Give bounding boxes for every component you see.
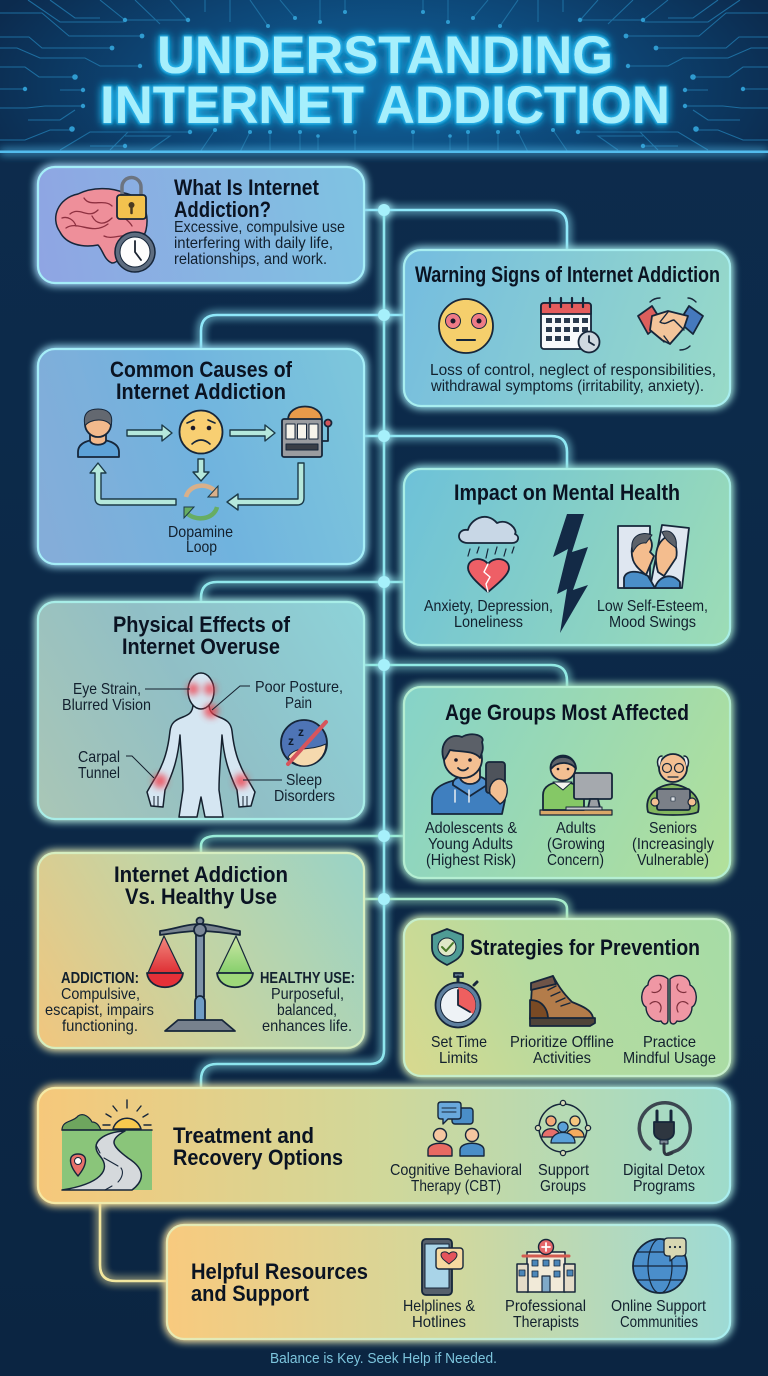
description: interfering with daily life, [174, 235, 333, 252]
text: healthy use: enhances life. [262, 1018, 352, 1035]
heading [191, 1259, 368, 1306]
labels: Seniors [649, 820, 697, 837]
icon: support groups [535, 1100, 591, 1156]
panel: helpful resources [167, 1225, 730, 1339]
callouts and labels: Pain [285, 695, 312, 712]
icon: calendar with clock [541, 298, 600, 352]
labels: (Growing [547, 836, 605, 853]
icon: cognitive behavioral therapy [428, 1102, 484, 1156]
text: addiction: Compulsive, [61, 986, 140, 1003]
labels: Limits [439, 1050, 478, 1067]
header banner [0, 0, 768, 153]
callouts and labels: Tunnel [78, 765, 120, 782]
labels: Activities [533, 1050, 591, 1067]
labels: Digital Detox [623, 1162, 705, 1179]
arrows: dopamine loop flow [90, 425, 304, 510]
heading [113, 612, 290, 659]
labels: Therapists [513, 1314, 579, 1331]
icon: road to recovery [62, 1100, 152, 1190]
panel: what is internet addiction [38, 167, 364, 283]
labels: Hotlines [412, 1314, 466, 1331]
labels: Cognitive Behavioral [390, 1162, 522, 1179]
icon: handshake [638, 298, 703, 350]
heading: Strategies for Prevention [470, 935, 700, 960]
icon: cracked mirror with faces [618, 525, 689, 588]
heading [174, 175, 319, 222]
icon: slot machine [282, 406, 332, 457]
icon: sleep disorder: z [298, 725, 304, 739]
callouts and labels: Poor Posture, [255, 679, 343, 696]
heading: Internet Addiction [114, 862, 288, 887]
panel: impact on mental health [404, 469, 730, 645]
icon: globe with chat bubble [633, 1238, 687, 1293]
callouts and labels: Disorders [274, 788, 335, 805]
labels: Adolescents & [425, 820, 517, 837]
description: withdrawal symptoms (irritability, anxiety). [430, 378, 704, 395]
icon: sleep disorder [281, 720, 327, 766]
heading: What Is Internet [174, 175, 319, 200]
panel: physical effects [38, 602, 364, 819]
labels: (Increasingly [632, 836, 714, 853]
labels [424, 598, 708, 631]
labels [425, 820, 714, 869]
icon: person [78, 409, 119, 457]
labels: Concern) [547, 852, 604, 869]
text: healthy use [260, 970, 355, 1035]
icon: brain [642, 975, 696, 1024]
text: healthy use: HEALTHY USE: [260, 970, 355, 987]
panel: warning signs [404, 250, 730, 406]
panel: age groups [404, 687, 730, 878]
title: INTERNET ADDICTION [100, 76, 670, 135]
icon: brain with padlock and clock [56, 178, 155, 272]
connector network [100, 204, 567, 1281]
description: Excessive, compulsive use [174, 219, 345, 236]
callouts and labels: Sleep [286, 772, 322, 789]
callouts and labels [62, 679, 343, 805]
labels: Programs [633, 1178, 695, 1195]
icon: face with red eyes [439, 299, 493, 353]
labels: Loneliness [454, 614, 523, 631]
labels: Prioritize Offline [510, 1034, 614, 1051]
heading: Internet Addiction [116, 379, 286, 404]
icon: unplug digital detox [639, 1103, 690, 1155]
labels: Groups [540, 1178, 586, 1195]
icon: senior with tablet [647, 754, 699, 815]
text: addiction [45, 970, 154, 1035]
heading: Physical Effects of [113, 612, 290, 637]
footer tagline: Balance is Key. Seek Help if Needed. [270, 1350, 497, 1367]
labels [403, 1298, 706, 1331]
icon: lightning bolt [553, 514, 588, 633]
callouts and labels: Eye Strain, [73, 681, 141, 698]
text: addiction: escapist, impairs [45, 1002, 154, 1019]
labels: Mindful Usage [623, 1050, 716, 1067]
labels: Helplines & [403, 1298, 475, 1315]
heading: Addiction? [174, 197, 271, 222]
heading: Internet Overuse [122, 634, 280, 659]
labels: Professional [505, 1298, 586, 1315]
labels: Set Time [431, 1034, 487, 1051]
heading: Recovery Options [173, 1145, 343, 1170]
panel: treatment and recovery [38, 1088, 730, 1203]
labels: Young Adults [428, 836, 513, 853]
labels [431, 1034, 716, 1067]
label: dopamine loop [168, 524, 233, 556]
title: UNDERSTANDING [157, 26, 613, 85]
text: addiction: ADDICTION: [61, 970, 139, 987]
heading: Vs. Healthy Use [125, 884, 277, 909]
panel: common causes [38, 349, 364, 564]
labels: (Highest Risk) [426, 852, 516, 869]
icon: shield [432, 929, 463, 965]
heading: Common Causes of [110, 357, 292, 382]
label: dopamine loop: Loop [186, 539, 217, 556]
description [174, 219, 345, 268]
description: Loss of control, neglect of responsibilities, [430, 362, 716, 379]
labels: Mood Swings [609, 614, 696, 631]
labels: Vulnerable) [637, 852, 709, 869]
label: dopamine loop: Dopamine [168, 524, 233, 541]
icon: young person with phone [432, 734, 507, 814]
heading: Helpful Resources [191, 1259, 368, 1284]
labels: Practice [643, 1034, 696, 1051]
heading [173, 1123, 343, 1170]
heading [114, 862, 288, 909]
text: healthy use: Purposeful, [271, 986, 344, 1003]
panel: strategies for prevention [404, 919, 730, 1076]
callouts and labels: Carpal [78, 749, 120, 766]
heading: Treatment and [173, 1123, 314, 1148]
text: addiction: functioning. [62, 1018, 138, 1035]
icon: sad face [180, 410, 222, 454]
labels: Communities [620, 1314, 698, 1331]
icon: hospital [517, 1240, 575, 1292]
icon: adult at computer [540, 756, 612, 815]
labels: Therapy (CBT) [411, 1178, 501, 1195]
heading: and Support [191, 1281, 309, 1306]
description: relationships, and work. [174, 251, 327, 268]
icon: cycle arrows [184, 486, 218, 518]
labels: Support [538, 1162, 589, 1179]
labels: Anxiety, Depression, [424, 598, 553, 615]
icon: stopwatch [436, 973, 480, 1028]
labels: Online Support [611, 1298, 706, 1315]
panel: addiction vs healthy use [38, 853, 364, 1048]
figure: human body [147, 673, 255, 817]
labels: Low Self-Esteem, [597, 598, 708, 615]
icon: balance scale [147, 918, 253, 1031]
heading [110, 357, 292, 404]
icon: sleep disorder: z [288, 734, 294, 748]
callouts and labels: Blurred Vision [62, 697, 151, 714]
description [430, 362, 716, 395]
text: healthy use: balanced, [277, 1002, 337, 1019]
icon: rain cloud and broken heart [459, 517, 518, 592]
heading: Age Groups Most Affected [445, 700, 689, 725]
labels: Adults [556, 820, 596, 837]
heading: Impact on Mental Health [454, 480, 680, 505]
title [100, 26, 670, 135]
labels [390, 1162, 705, 1195]
icon: hiking boot [530, 976, 595, 1026]
icon: phone with heart [422, 1239, 463, 1295]
